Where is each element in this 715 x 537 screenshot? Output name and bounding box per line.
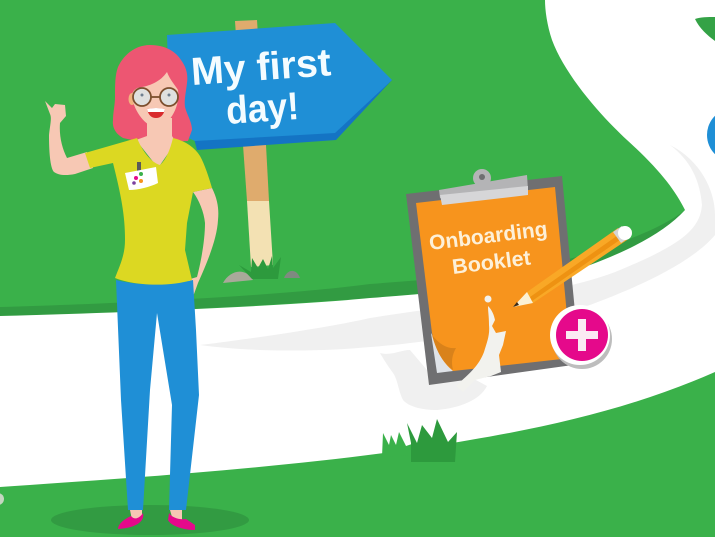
ground shadow bbox=[51, 505, 249, 535]
sign arrow bbox=[167, 23, 392, 150]
lower right arm bbox=[186, 188, 218, 300]
booklet title bbox=[428, 218, 549, 279]
sign text bbox=[190, 41, 332, 133]
sheet under curl bbox=[431, 333, 453, 373]
hair bbox=[113, 45, 192, 143]
sign text: My first bbox=[190, 41, 332, 94]
sign text: day! bbox=[225, 85, 300, 133]
eyes bbox=[140, 94, 144, 96]
shoes bbox=[118, 513, 195, 530]
neck and chest bbox=[136, 118, 176, 168]
woman character bbox=[45, 45, 249, 535]
top right green corner bbox=[695, 17, 715, 41]
orange paper bbox=[416, 187, 571, 371]
clipboard board bbox=[406, 176, 580, 385]
upper lawn darker edge bbox=[0, 210, 685, 316]
road shadow swoosh bbox=[200, 145, 715, 351]
grass tuft on lawn bbox=[382, 419, 457, 462]
clip bbox=[439, 169, 528, 205]
name badge bbox=[125, 162, 158, 190]
face bbox=[132, 72, 178, 128]
feet bbox=[130, 510, 142, 520]
plus button bbox=[550, 305, 612, 369]
clipboard bbox=[380, 169, 632, 410]
glasses bbox=[133, 88, 178, 106]
top right blue circle bbox=[707, 108, 715, 162]
left bottom grey trace bbox=[0, 493, 4, 505]
ear bbox=[128, 93, 136, 105]
pencil bbox=[513, 226, 632, 307]
raised arm bbox=[45, 101, 93, 175]
milk splash bbox=[456, 296, 506, 392]
yellow shirt bbox=[85, 138, 212, 285]
splash shadow on road bbox=[380, 350, 487, 410]
blue trousers bbox=[116, 280, 199, 510]
signpost bbox=[167, 20, 392, 267]
page curl bbox=[432, 335, 456, 370]
rocks and grass at post bbox=[223, 256, 300, 283]
booklet title: Onboarding bbox=[428, 218, 549, 255]
booklet title: Booklet bbox=[451, 247, 532, 279]
mouth bbox=[147, 108, 165, 118]
